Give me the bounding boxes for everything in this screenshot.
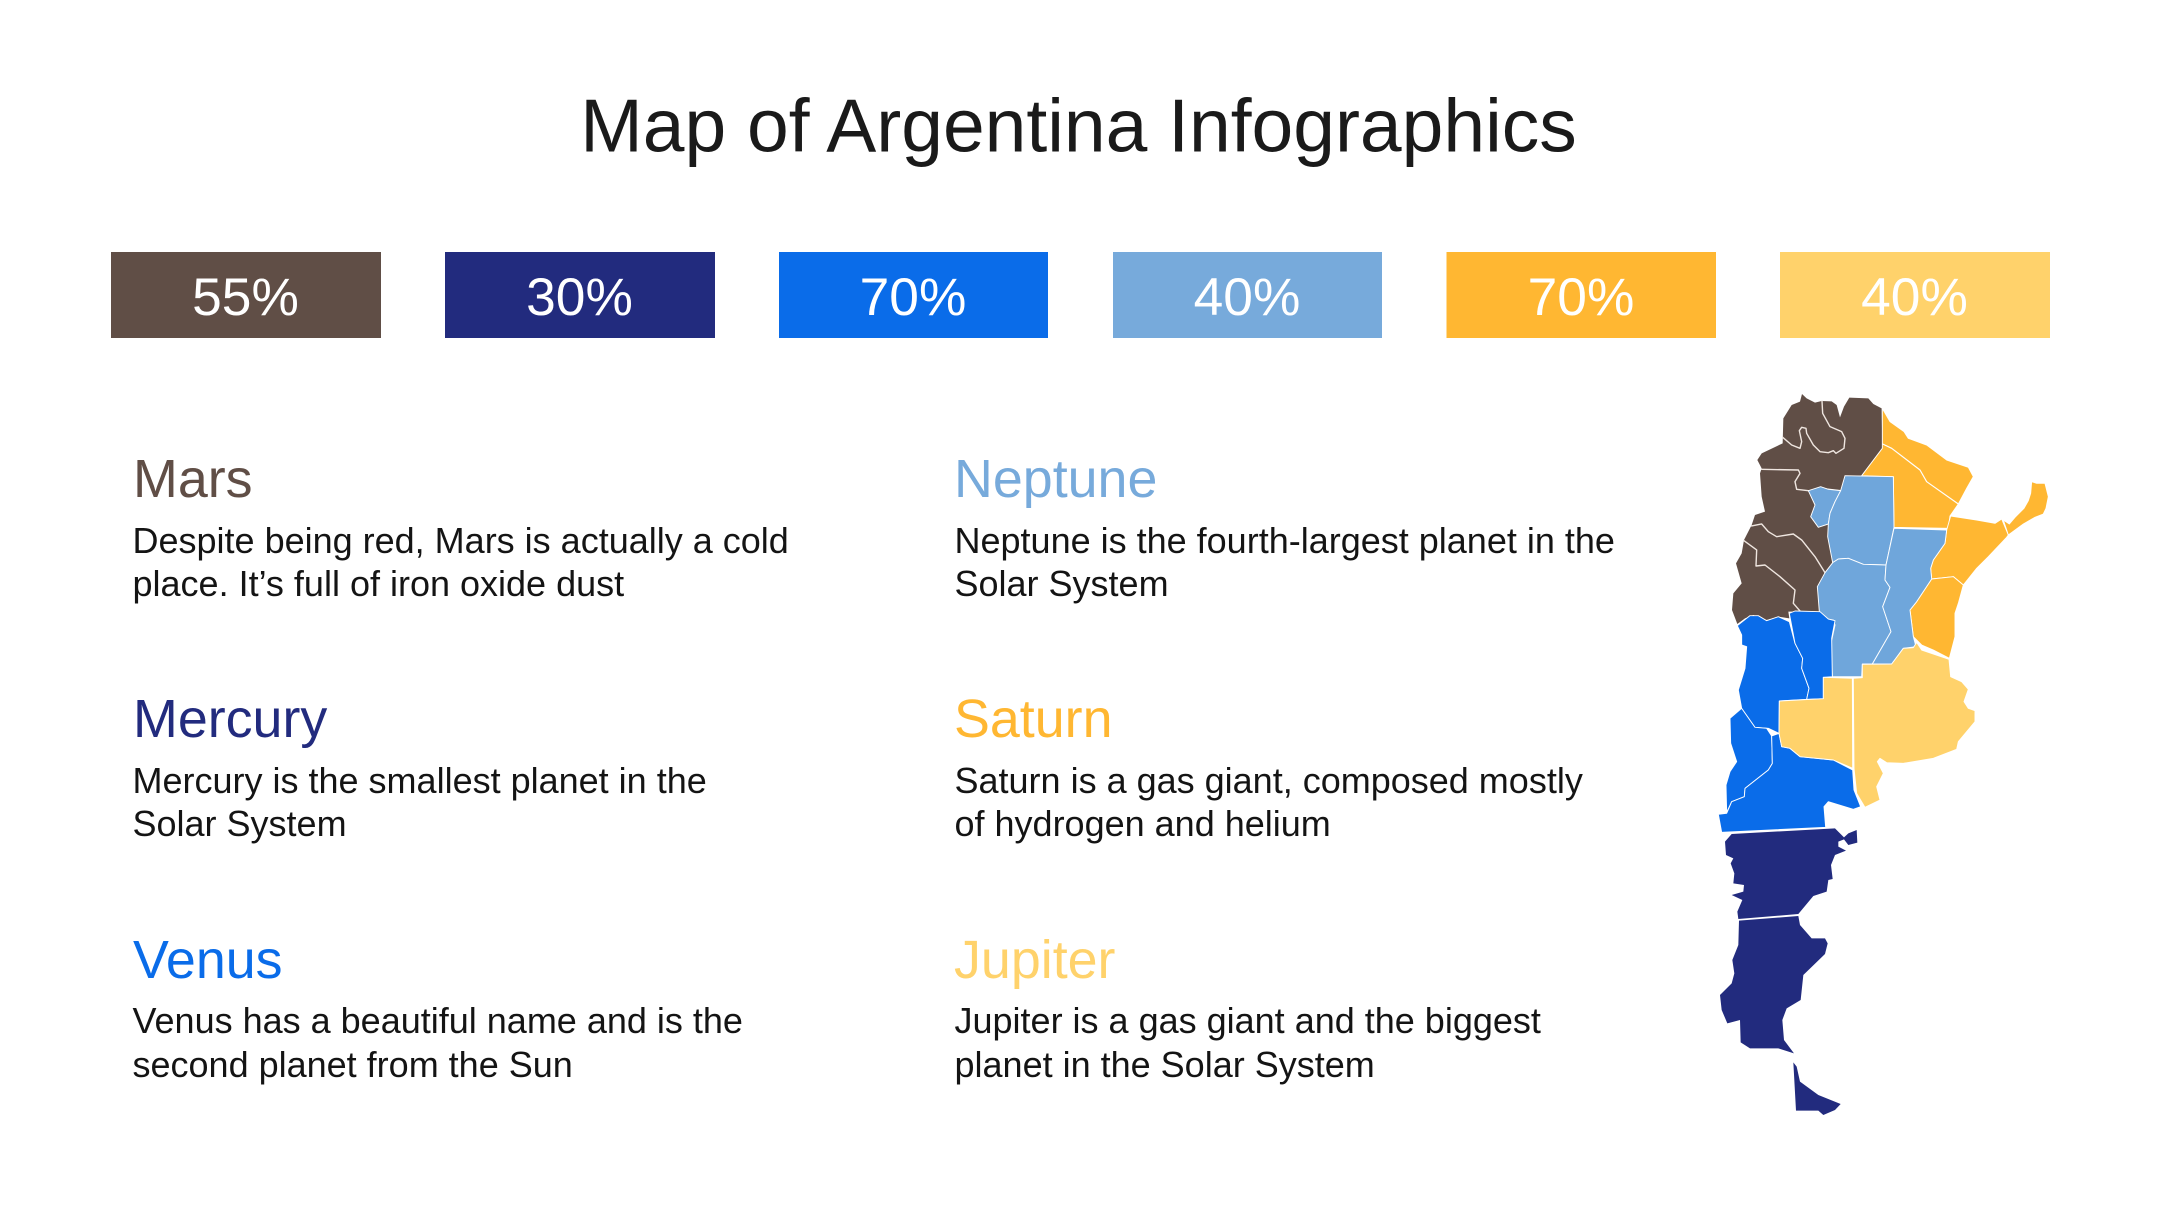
text block: Jupiter: Jupiter is a gas giant and the biggest: [954, 1000, 1541, 1041]
bar: Venus 70%: 70%: [860, 268, 966, 327]
text block: Jupiter: Jupiter: [954, 930, 1116, 990]
bar: Jupiter 40%: [1780, 252, 2050, 338]
text block: Saturn: of hydrogen and helium: [954, 803, 1331, 844]
bar: Saturn 70%: [1446, 252, 1716, 338]
percentage bars: [111, 252, 2050, 338]
map region: brown north-west provinces: [1732, 394, 1882, 624]
text block: Neptune: Neptune: [954, 449, 1157, 509]
text block: Venus: Venus: [133, 930, 283, 990]
text block: Mercury: Solar System: [132, 803, 347, 844]
bar: Neptune 40%: 40%: [1194, 268, 1300, 327]
text block: Mars: Despite being red, Mars is actually a cold: [132, 520, 789, 561]
text block: Neptune: Solar System: [954, 563, 1169, 604]
text block: Jupiter: planet in the Solar System: [954, 1044, 1375, 1085]
map of Argentina: [1718, 394, 2048, 1115]
text block: Venus: Venus has a beautiful name and is the: [132, 1000, 743, 1041]
bar: Saturn 70%: 70%: [1528, 268, 1634, 327]
bar: Mercury 30%: [445, 252, 715, 338]
bar: Venus 70%: [779, 252, 1048, 338]
bar: Neptune 40%: [1113, 252, 1382, 338]
text block: Saturn: Saturn is a gas giant, composed mostly: [954, 760, 1583, 801]
text block: Jupiter: [954, 930, 1541, 1085]
text block: Saturn: [954, 689, 1583, 844]
bar: Mars 55%: [111, 252, 381, 338]
map region: yellow Pampas provinces: [1779, 642, 1975, 807]
text block: Mercury: Mercury is the smallest planet in the: [132, 760, 707, 801]
text block: Venus: [132, 930, 743, 1085]
map region: orange north-east provinces: [1862, 408, 2048, 658]
map region: light blue central provinces: [1808, 476, 1947, 677]
text block: Mars: place. It’s full of iron oxide dust: [132, 563, 624, 604]
map region: navy southern provinces: [1720, 828, 1857, 1115]
text block: Mars: Mars: [133, 449, 253, 509]
bar: Mars 55%: 55%: [192, 268, 299, 327]
title: Map of Argentina Infographics: [580, 84, 1577, 168]
text block: Neptune: [954, 449, 1615, 604]
bar: Jupiter 40%: 40%: [1861, 268, 1968, 327]
text block: Venus: second planet from the Sun: [132, 1044, 573, 1085]
text block: Mars: [132, 449, 789, 604]
text block: Neptune: Neptune is the fourth-largest planet in the: [954, 520, 1615, 561]
text block: Saturn: Saturn: [954, 689, 1113, 749]
text block: Mercury: Mercury: [133, 689, 327, 749]
text block: Mercury: [132, 689, 707, 844]
bar: Mercury 30%: 30%: [526, 268, 633, 327]
map region: blue Cuyo and Patagonia provinces: [1718, 611, 1861, 832]
